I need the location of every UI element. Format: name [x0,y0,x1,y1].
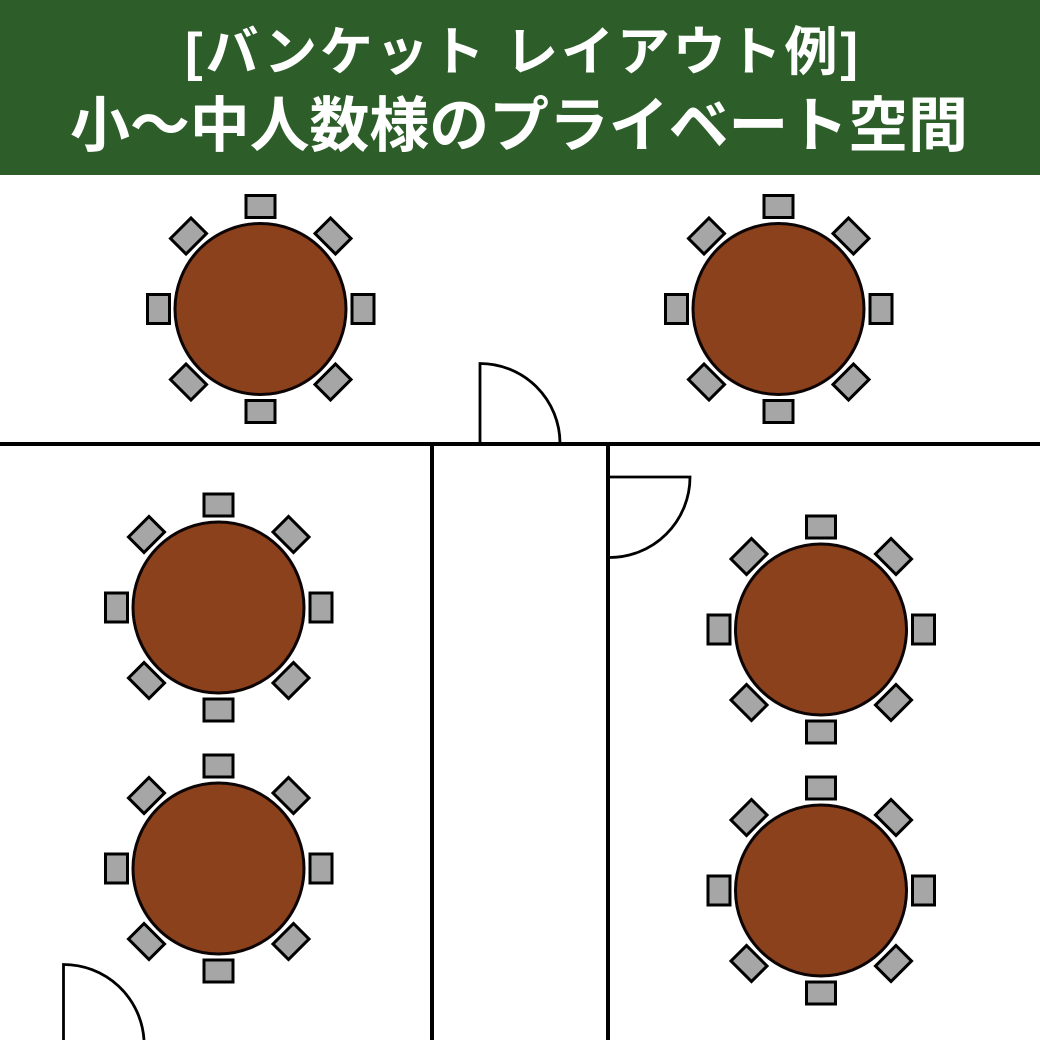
title line 2: 小～中人数様のプライベート空間 [70,92,968,160]
header banner [0,0,1040,175]
door: top room entrance [480,364,560,443]
table: upper right [666,196,892,422]
table: right room lower [708,777,934,1004]
table: right room upper [708,516,934,743]
door: right room [609,477,690,558]
title line 1: [バンケット レイアウト例] [185,23,858,82]
table: upper left [148,196,374,422]
walls [0,444,1040,1040]
table: left room upper [106,494,332,721]
door: left room [64,964,144,1040]
table: left room lower [106,755,332,982]
